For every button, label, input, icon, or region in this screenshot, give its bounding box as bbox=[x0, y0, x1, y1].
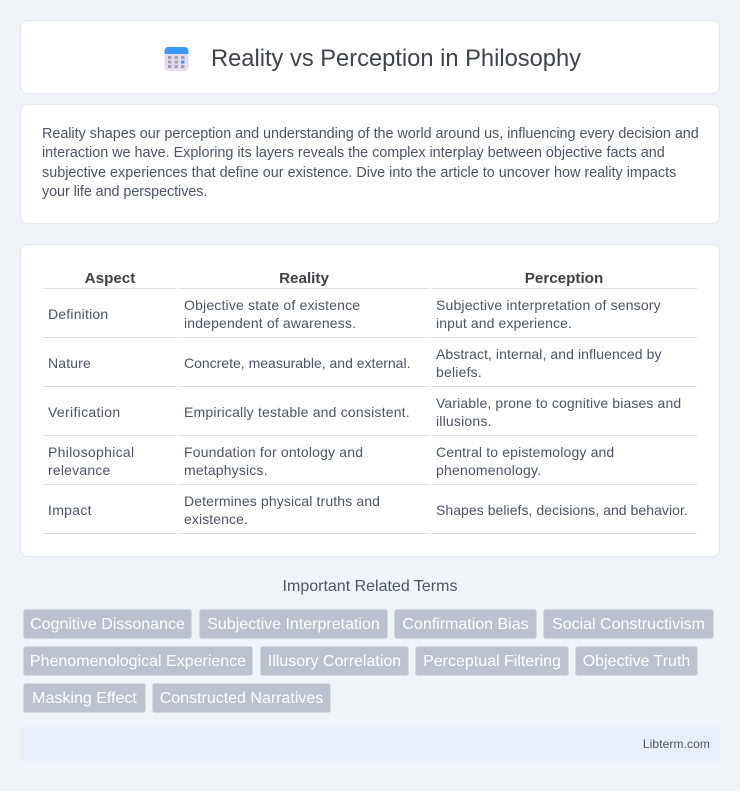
tag: Subjective Interpretation bbox=[207, 616, 380, 633]
title: Reality vs Perception in Philosophy bbox=[211, 46, 581, 72]
row: nature: beliefs. bbox=[436, 364, 482, 380]
row: philosophical relevance: Philosophical bbox=[48, 444, 134, 460]
table panel bbox=[20, 244, 720, 557]
row: verification: Verification bbox=[48, 404, 120, 420]
row: definition: Subjective interpretation of sensory bbox=[436, 297, 661, 313]
row: philosophical relevance: Central to epistemology and bbox=[436, 444, 614, 460]
tag: Perceptual Filtering bbox=[423, 653, 561, 670]
icon: calendar grid bbox=[164, 47, 188, 71]
row: nature bbox=[48, 346, 662, 380]
comparison table bbox=[43, 270, 697, 534]
row: philosophical relevance: relevance bbox=[48, 462, 111, 478]
table header: Perception bbox=[525, 270, 603, 287]
intro text bbox=[42, 126, 699, 200]
footer credit: Libterm.com bbox=[643, 737, 710, 751]
tag: Constructed Narratives bbox=[160, 690, 323, 707]
tag bbox=[23, 683, 146, 713]
tag: Confirmation Bias bbox=[402, 616, 529, 633]
row: impact: Determines physical truths and bbox=[184, 493, 380, 509]
row: impact bbox=[48, 493, 688, 527]
tag: Masking Effect bbox=[32, 690, 137, 707]
tag bbox=[260, 646, 409, 676]
tag: Illusory Correlation bbox=[268, 653, 401, 670]
tag bbox=[152, 683, 331, 713]
row: verification: Empirically testable and consistent. bbox=[184, 404, 410, 420]
row: philosophical relevance bbox=[48, 444, 614, 478]
row: impact: Shapes beliefs, decisions, and behavior. bbox=[436, 502, 688, 518]
tag bbox=[394, 609, 537, 639]
tag: Social Constructivism bbox=[552, 616, 705, 633]
row: philosophical relevance: metaphysics. bbox=[184, 462, 268, 478]
row: definition: Definition bbox=[48, 306, 108, 322]
intro text: your life and perspectives. bbox=[42, 184, 207, 200]
table header: Reality bbox=[279, 270, 329, 287]
tag bbox=[415, 646, 569, 676]
table header: Aspect bbox=[85, 270, 135, 287]
intro text: Reality shapes our perception and understanding of the world around us, influencing every decision and bbox=[42, 126, 699, 142]
tag bbox=[199, 609, 388, 639]
table header bbox=[85, 270, 603, 287]
row: philosophical relevance: phenomenology. bbox=[436, 462, 541, 478]
row: nature: Nature bbox=[48, 355, 91, 371]
related terms heading: Important Related Terms bbox=[283, 578, 457, 595]
tag bbox=[575, 646, 698, 676]
row: definition: input and experience. bbox=[436, 315, 572, 331]
related terms tags bbox=[23, 609, 714, 713]
row: definition bbox=[48, 297, 661, 331]
tag bbox=[23, 609, 192, 639]
intro panel bbox=[20, 104, 720, 224]
footer bar bbox=[20, 727, 720, 761]
row: verification: Variable, prone to cognitive biases and bbox=[436, 395, 681, 411]
row: nature: Concrete, measurable, and external. bbox=[184, 355, 410, 371]
row: definition: independent of awareness. bbox=[184, 315, 356, 331]
row: philosophical relevance: Foundation for ontology and bbox=[184, 444, 363, 460]
intro text: interaction we have. Exploring its layers reveals the complex interplay between objective facts and bbox=[42, 145, 665, 161]
tag: Phenomenological Experience bbox=[30, 653, 246, 670]
tag bbox=[543, 609, 714, 639]
tag: Objective Truth bbox=[583, 653, 690, 670]
row: nature: Abstract, internal, and influenced by bbox=[436, 346, 662, 362]
row: definition: Objective state of existence bbox=[184, 297, 360, 313]
tag bbox=[23, 646, 253, 676]
row: impact: Impact bbox=[48, 502, 92, 518]
tag: Cognitive Dissonance bbox=[30, 616, 185, 633]
row: verification bbox=[48, 395, 681, 429]
row: verification: illusions. bbox=[436, 413, 492, 429]
row: impact: existence. bbox=[184, 511, 248, 527]
intro text: subjective experiences that define our existence. Dive into the article to uncover how reality impacts bbox=[42, 165, 676, 181]
header panel bbox=[20, 20, 720, 94]
